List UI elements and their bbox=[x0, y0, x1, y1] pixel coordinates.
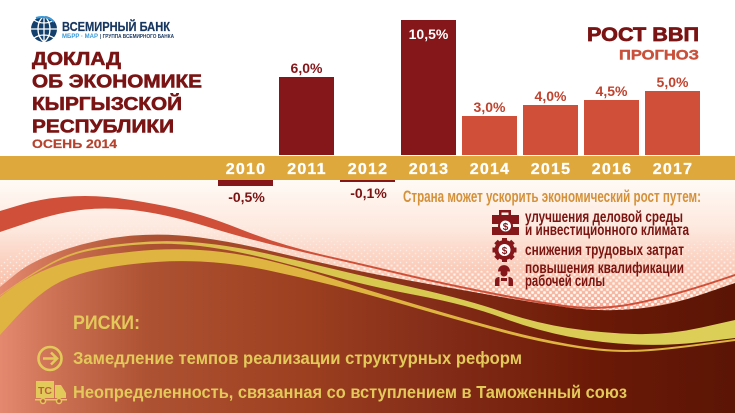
year labels: 2011 bbox=[287, 161, 327, 178]
bars: actual values bbox=[218, 20, 456, 186]
value labels: 5,0% bbox=[657, 74, 689, 90]
subtitle: autumn 2014: ОСЕНЬ 2014 bbox=[32, 137, 117, 151]
logo: World Bank bbox=[31, 16, 174, 42]
year labels: 2012 bbox=[348, 161, 388, 178]
item 3 bbox=[525, 260, 684, 290]
bars: forecast values bbox=[462, 91, 700, 155]
risks heading: РИСКИ: bbox=[73, 313, 140, 334]
bar chart: GDP growth bbox=[218, 20, 700, 205]
year band bbox=[0, 156, 735, 180]
icon: globe bbox=[31, 16, 57, 42]
growth ways panel bbox=[403, 188, 701, 290]
value labels: 4,0% bbox=[535, 88, 567, 104]
logo group name: | ГРУППА ВСЕМИРНОГО БАНКА bbox=[100, 34, 174, 40]
item 3: повышения квалификации bbox=[525, 260, 684, 277]
risk 2: Неопределенность, связанная со вступлением в Таможенный союз bbox=[73, 382, 627, 402]
item 2: снижения трудовых затрат bbox=[525, 242, 684, 259]
value labels: 10,5% bbox=[409, 26, 449, 42]
icon: customs union truck bbox=[35, 381, 67, 404]
value labels: 3,0% bbox=[474, 99, 506, 115]
title: КЫРГЫЗСКОЙ bbox=[32, 93, 182, 114]
gold ribbon wave bbox=[0, 249, 735, 352]
year labels bbox=[226, 161, 693, 178]
logo sublabel: МБРР · МАР bbox=[62, 34, 98, 40]
halftone dot pattern bbox=[0, 232, 735, 310]
item 1: улучшения деловой среды bbox=[525, 209, 683, 226]
value labels: -0,1% bbox=[350, 185, 387, 201]
logo wordmark: ВСЕМИРНЫЙ БАНК bbox=[62, 19, 170, 34]
icon: gear with dollar bbox=[492, 238, 516, 262]
year labels: 2016 bbox=[592, 161, 632, 178]
chart heading: РОСТ ВВП bbox=[587, 25, 699, 46]
year labels: 2015 bbox=[531, 161, 571, 178]
year labels: 2017 bbox=[653, 161, 693, 178]
value labels: 6,0% bbox=[291, 60, 323, 76]
dark lower body with gradient bbox=[0, 235, 735, 413]
risk 1: Замедление темпов реализации структурных реформ bbox=[73, 348, 522, 368]
lime ribbon wave bbox=[0, 241, 735, 345]
year labels: 2010 bbox=[226, 161, 266, 178]
icon: briefcase: $ bbox=[503, 222, 509, 233]
title: РЕСПУБЛИКИ bbox=[32, 116, 174, 136]
bottom text: risks bbox=[35, 313, 627, 404]
red ribbon wave bbox=[0, 196, 735, 309]
value labels: 4,5% bbox=[596, 83, 628, 99]
title: ОБ ЭКОНОМИКЕ bbox=[32, 70, 202, 92]
icon: briefcase bbox=[492, 210, 519, 235]
value labels: -0,5% bbox=[228, 189, 265, 205]
icon: customs union truck: ТС bbox=[38, 386, 52, 397]
item 1 bbox=[525, 209, 689, 239]
year labels: 2013 bbox=[409, 161, 449, 178]
icon: arrow in circle bbox=[38, 347, 62, 370]
title: ДОКЛАД bbox=[32, 48, 121, 69]
year labels: 2014 bbox=[470, 161, 510, 178]
chart subheading: ПРОГНОЗ bbox=[619, 46, 699, 62]
item 3: рабочей силы bbox=[525, 273, 605, 290]
item 1: и инвестиционного климата bbox=[525, 222, 689, 239]
title bbox=[32, 48, 202, 136]
value labels bbox=[228, 26, 689, 205]
icon: worker bbox=[495, 265, 513, 286]
icon: gear with dollar: $ bbox=[502, 246, 508, 257]
